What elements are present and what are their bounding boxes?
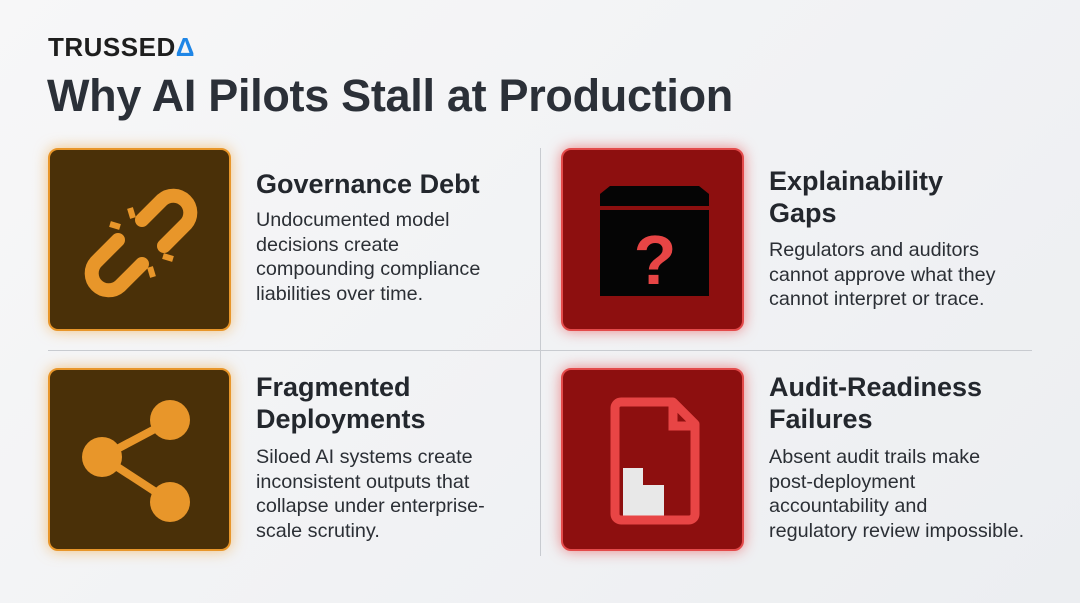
text: scale scrutiny. <box>256 520 380 542</box>
heading <box>769 166 943 228</box>
text: regulatory review impossible. <box>769 520 1024 542</box>
text: cannot interpret or trace. <box>769 288 985 310</box>
text <box>256 446 485 542</box>
text: Regulators and auditors <box>769 239 979 261</box>
icon: black box question <box>561 148 744 331</box>
icon: broken chain <box>48 148 231 331</box>
panel: explainability gaps <box>551 138 996 341</box>
text: accountability and <box>769 495 927 517</box>
panel: governance debt <box>38 138 480 342</box>
icon: document <box>561 368 744 551</box>
text: liabilities over time. <box>256 282 423 304</box>
heading: Audit-Readiness <box>769 372 982 402</box>
text <box>256 209 480 304</box>
heading: Explainability <box>769 166 943 196</box>
title: Why AI Pilots Stall at Production <box>47 70 733 121</box>
text: post-deployment <box>769 470 915 492</box>
text: decisions create <box>256 234 399 256</box>
text: collapse under enterprise- <box>256 495 485 517</box>
heading <box>769 372 982 434</box>
heading: Gaps <box>769 198 837 228</box>
logo: TRUSSEDΔ <box>48 32 195 62</box>
text: Siloed AI systems create <box>256 446 473 468</box>
text <box>769 239 996 310</box>
text <box>769 446 1024 542</box>
heading: Deployments <box>256 404 426 434</box>
text: compounding compliance <box>256 258 480 280</box>
panel: fragmented deployments <box>38 358 485 562</box>
text: Absent audit trails make <box>769 446 980 468</box>
text: Undocumented model <box>256 209 450 231</box>
heading: Governance Debt <box>256 169 480 199</box>
icon: black box question: ? <box>634 221 676 299</box>
panel: audit-readiness failures <box>551 358 1024 561</box>
text: inconsistent outputs that <box>256 470 469 492</box>
heading <box>256 372 426 434</box>
icon: share nodes <box>48 368 231 551</box>
heading: Failures <box>769 404 873 434</box>
heading: Fragmented <box>256 372 411 402</box>
text: cannot approve what they <box>769 264 996 286</box>
